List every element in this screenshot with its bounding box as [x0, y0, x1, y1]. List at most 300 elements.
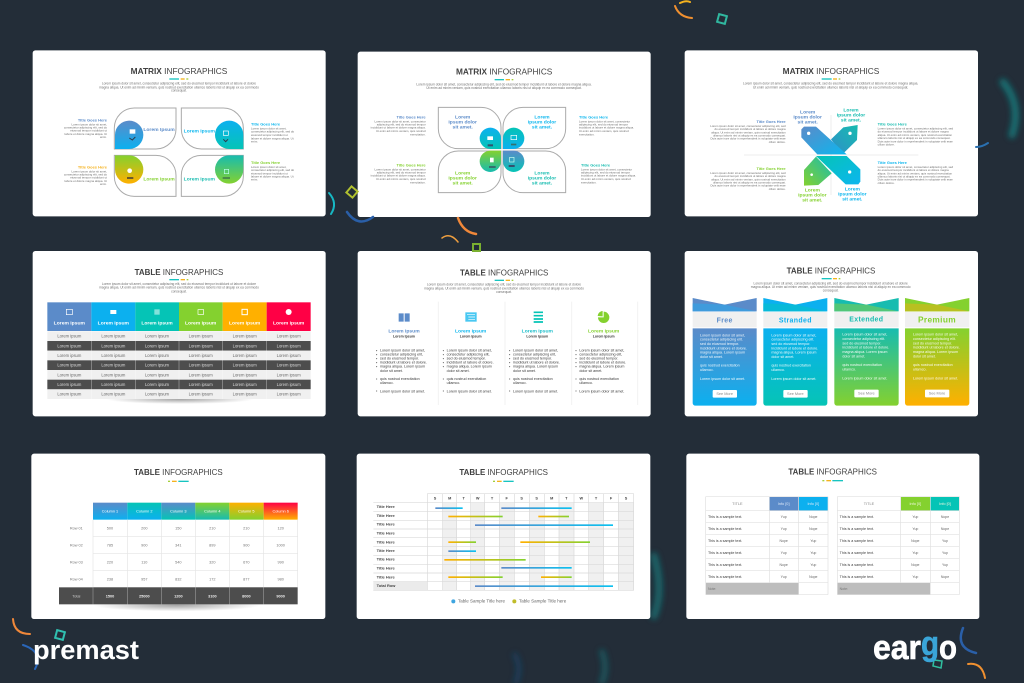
striped rows: Lorem ipsum	[277, 334, 301, 339]
gradient blob: top right	[503, 128, 524, 149]
side text: top left: Ut enim ad minim veniam, quis nostrud	[376, 129, 426, 133]
column 3: Lorem ipsum dolor sit amet.	[513, 389, 558, 393]
icons	[127, 129, 230, 179]
comparison table right: Yup	[912, 575, 918, 579]
total row: 25000	[139, 594, 150, 598]
comparison table right: This is a sample text.	[840, 551, 874, 555]
data grid: 320	[209, 560, 216, 564]
panel: table infographic 8 gantt	[357, 454, 650, 619]
comparison table right: This is a sample text.	[840, 563, 874, 567]
gantt grid: F	[610, 497, 613, 501]
gantt grid: W	[580, 497, 584, 501]
side text: top left: Lorem ipsum dolor sit amet, consectetur adipiscing elit, sed	[710, 124, 786, 128]
column 2: Lorem Ipsum	[460, 335, 482, 339]
panel: matrix infographic 3	[685, 50, 978, 216]
striped rows: Lorem ipsum	[233, 353, 257, 358]
column 2: dolor sit amet.	[447, 369, 470, 373]
plan: stranded: Lorem ipsum dolor sit amet,	[771, 333, 816, 337]
side text: bottom right: Ut enim ad minim veniam, quis nostrud	[581, 177, 631, 181]
column 4: consectetur adipiscing elit,	[579, 353, 622, 357]
petal labels: sit amet.	[453, 180, 473, 186]
comparison table left: Yup	[810, 563, 816, 567]
side text: top left: Lorem ipsum dolor sit amet,	[72, 122, 107, 126]
side text: top left: consectetur adipiscing elit, sed do	[64, 125, 107, 129]
side text: bottom right: Lorem ipsum dolor sit amet,	[251, 165, 287, 169]
plan: free: ullamco.	[700, 368, 714, 372]
data grid: 172	[209, 577, 216, 581]
petal labels: Lorem	[534, 171, 550, 177]
striped rows: Lorem ipsum	[145, 363, 170, 368]
row labels: Title Here	[377, 539, 396, 544]
striped rows: Lorem ipsum	[145, 372, 170, 377]
side text: bottom right: adipiscing elit, sed do eiusmod tempor	[581, 170, 630, 174]
side text: bottom left: aliqua. Ut enim ad minim veniam, quis nostrud exercitation	[711, 177, 786, 181]
side text: top right	[251, 122, 295, 143]
data grid: 670	[243, 560, 250, 564]
side text: bottom right: eiusmod tempor incididunt ut	[251, 171, 288, 175]
panel: table infographic 9	[686, 454, 979, 619]
comparison table left: Yup	[810, 551, 816, 555]
comparison table left: Yup	[781, 515, 787, 519]
data grid: 500	[107, 526, 113, 530]
striped rows: Lorem ipsum	[145, 334, 170, 339]
striped rows: Lorem ipsum	[57, 343, 82, 348]
plan: extended: magna aliqua. Lorem ipsum	[842, 350, 887, 354]
side text: top right: Ut enim ad minim veniam, quis nostrud	[579, 129, 629, 133]
column 2: sed do eiusmod tempor.	[447, 357, 486, 361]
column 3: Lorem ipsum dolor sit amet,	[513, 349, 558, 353]
plan: premium: dolor sit amet.	[913, 354, 936, 358]
column 3: ullamco.	[513, 381, 527, 385]
data grid: Row 02	[70, 543, 83, 547]
comparison table left: Nope	[779, 539, 788, 543]
background glows	[515, 82, 1015, 682]
gantt grid: S	[535, 497, 538, 501]
plan: stranded: Lorem ipsum dolor sit amet.	[771, 377, 816, 381]
column 2: magna aliqua. Lorem ipsum	[447, 365, 492, 369]
side text: top left: incididunt ut labore et dolore magna aliqua.	[371, 126, 426, 130]
gradient blob: top left	[115, 121, 143, 149]
gradient header	[93, 503, 298, 520]
column 1: incididunt ut labore et dolore.	[380, 361, 427, 365]
comparison table left	[706, 497, 828, 595]
comparison table left: This is a sample text.	[708, 563, 742, 567]
x shape labels: Ipsum dolor	[838, 192, 867, 198]
side text: top left: Duis aute irure dolor in reprehenderit in voluptate velit esse	[711, 137, 786, 141]
striped rows: Lorem ipsum	[145, 353, 170, 358]
comparison table right: Yup	[912, 515, 918, 519]
intro text: Lorem ipsum dolor sit amet, consectetur adipiscing elit, sed do eiusmod tempor incididunt ut labore et dolore magna aliqua.	[743, 82, 918, 86]
side text: top right: incididunt ut labore et dolore magna aliqua.	[579, 126, 634, 130]
plan: stranded: magna aliqua. Lorem ipsum	[771, 351, 816, 355]
column 2: Lorem ipsum dolor sit amet.	[447, 389, 492, 393]
intro text: Lorem ipsum dolor sit amet, consectetur adipiscing elit, sed do eiusmod tempor incididunt ut labore et dolore	[754, 281, 908, 285]
intro text: consequat.	[823, 289, 839, 293]
striped rows: Lorem ipsum	[189, 353, 213, 358]
side text: top right: Lorem ipsum dolor sit amet,	[251, 127, 287, 131]
intro text: Lorem ipsum dolor sit amet, consectetur adipiscing elit, sed do eiusmod tempor incididunt ut labore et dolore	[102, 282, 256, 286]
plan: premium: See More	[929, 392, 945, 396]
striped rows: Lorem ipsum	[277, 363, 301, 368]
plan: premium: quis nostrud exercitation	[913, 363, 953, 367]
side text: top right: labore et dolore magna aliqua. Ut	[251, 136, 294, 140]
side text: top left	[710, 119, 786, 144]
comparison table left: Info [0]	[778, 502, 790, 506]
data grid: 877	[243, 577, 250, 581]
row labels: Total Row	[377, 583, 396, 588]
striped rows: Lorem ipsum	[233, 363, 257, 368]
column 3: dolor sit amet.	[513, 369, 536, 373]
title accent	[822, 480, 843, 481]
data grid: 120	[277, 526, 284, 530]
gantt grid: T	[491, 497, 494, 501]
comparison table right: Yup	[912, 551, 918, 555]
row labels: Title Here	[377, 513, 396, 518]
matrix labels: Lorem Ipsum	[143, 127, 175, 133]
panel: table infographic 5	[358, 251, 651, 416]
plan: stranded: sed do eiusmod tempor.	[771, 342, 810, 346]
side text: top right: Lorem ipsum dolor sit amet, consectetur	[579, 119, 630, 123]
x shape labels: sit amet.	[802, 198, 823, 204]
total row: 1200	[174, 594, 183, 598]
data grid: Row 01	[70, 526, 83, 530]
x shape labels: Lorem	[800, 109, 816, 115]
side text: bottom left: enim.	[100, 182, 107, 186]
petal labels: ipsum dolor	[528, 176, 556, 182]
striped rows: Lorem ipsum	[277, 392, 301, 397]
data grid	[70, 520, 298, 587]
side text: top right: adipiscing elit, sed do eiusmod tempor	[579, 122, 628, 126]
panel: table infographic 7	[31, 454, 325, 619]
gantt grid: F	[505, 497, 508, 501]
side text: bottom right: Lorem ipsum dolor sit amet, consectetur	[581, 167, 632, 171]
striped rows: Lorem ipsum	[189, 343, 213, 348]
striped rows: Lorem ipsum	[57, 372, 82, 377]
column 3: incididunt ut labore et dolore.	[513, 361, 560, 365]
comparison table left: Yup	[781, 575, 787, 579]
side text: bottom left: Ut enim ad minim veniam, quis nostrud	[376, 177, 426, 181]
column 2: consectetur adipiscing elit,	[447, 353, 490, 357]
total row: 8000	[242, 594, 251, 598]
gantt grid: M	[550, 497, 553, 501]
comparison table right: Yup	[942, 551, 948, 555]
intro text: magna aliqua. Ut enim ad minim veniam, quis nostrud exercitation ullamco laboris nisi ut aliquip ex ea commodo	[751, 285, 911, 289]
colour header row: Lorem Ipsum	[185, 320, 217, 326]
colour header row	[47, 302, 311, 331]
data grid: 832	[175, 577, 182, 581]
gradient header: Column 4	[204, 509, 221, 513]
table shadow	[107, 395, 253, 404]
side text: bottom right: Lorem ipsum dolor sit amet, consectetur adipiscing elit, sed	[878, 165, 953, 169]
petal outlines	[438, 107, 566, 193]
plan: stranded: incididunt ut labore et dolore.	[771, 346, 818, 350]
comparison table right: Nope	[911, 563, 920, 567]
gantt grid: M	[448, 497, 451, 501]
column 1: consectetur adipiscing elit,	[380, 353, 423, 357]
plan: premium: magna aliqua. Lorem ipsum	[913, 350, 958, 354]
striped rows: Lorem ipsum	[145, 343, 170, 348]
striped rows: Lorem ipsum	[57, 363, 82, 368]
x shape labels: Ipsum dolor	[798, 193, 827, 199]
column 4: incididunt ut labore et dolore.	[579, 361, 626, 365]
total row: 3100	[208, 594, 217, 598]
side text: bottom right: labore et dolore magna aliqua. Ut	[251, 175, 294, 179]
legend: Table Sample Title here	[519, 599, 567, 604]
gantt grid: T	[595, 497, 598, 501]
plan: extended: incididunt ut labore et dolore.	[842, 346, 889, 350]
side text: bottom left: incididunt ut labore et dolore magna aliqua.	[371, 174, 426, 178]
side text: top right: exercitation.	[579, 132, 595, 136]
title: TABLE INFOGRAPHICS	[134, 467, 223, 477]
plan: extended	[834, 298, 899, 406]
comparison table left: Note:	[708, 587, 716, 591]
data grid: 200	[141, 526, 148, 530]
striped rows: Lorem ipsum	[101, 353, 126, 358]
colour header row: Lorem Ipsum	[141, 320, 173, 326]
side text: bottom left: Lorem ipsum dolor sit amet,	[72, 169, 107, 173]
comparison table right: This is a sample text.	[840, 539, 874, 543]
gradient header: Column 2	[136, 509, 153, 513]
intro text: Lorem ipsum dolor sit amet, consectetur adipiscing elit, sed do eiusmod tempor incididunt ut labore et dolore	[427, 283, 581, 287]
petal labels	[448, 115, 556, 187]
row labels: Title Here	[377, 522, 396, 527]
gantt grid: S	[520, 497, 523, 501]
title accent	[822, 278, 840, 279]
colour header row: Lorem Ipsum	[273, 320, 305, 326]
total row: 9000	[276, 594, 285, 598]
data grid: 980	[277, 577, 284, 581]
title: TABLE INFOGRAPHICS	[460, 267, 549, 277]
striped rows: Lorem ipsum	[277, 372, 301, 377]
striped rows	[47, 331, 311, 399]
data grid: 220	[107, 560, 113, 564]
title accent	[168, 481, 189, 482]
side text: bottom left: labore et dolore magna aliqua. Ut	[64, 179, 107, 183]
title accent	[822, 78, 840, 80]
striped rows: Lorem ipsum	[189, 372, 213, 377]
side text: top left: adipiscing elit, sed do eiusmod tempor	[377, 122, 426, 126]
side text: top right: do eiusmod tempor incididunt ut labore et dolore magna	[878, 130, 949, 134]
data grid: 210	[243, 526, 250, 530]
column 1: ullamco.	[380, 381, 394, 385]
comparison table right: Yup	[912, 527, 918, 531]
legend	[451, 599, 567, 604]
icons	[487, 135, 517, 168]
side text: top left: aliqua. Ut enim ad minim veniam, quis nostrud exercitation	[711, 130, 786, 134]
striped rows: Lorem ipsum	[233, 392, 257, 397]
logo: eargo	[873, 625, 957, 667]
column 2: ullamco.	[447, 381, 460, 385]
logo: premast: premast	[33, 635, 139, 665]
side text: bottom left: consectetur adipiscing elit, sed do	[64, 172, 107, 176]
column 4: ullamco.	[579, 381, 593, 385]
petal labels: ipsum dolor	[448, 120, 477, 126]
plan: stranded: Stranded	[779, 317, 812, 324]
plan: stranded	[763, 298, 827, 406]
side text: top left: Title Goes Here	[756, 119, 786, 124]
column 4: magna aliqua. Lorem ipsum	[579, 365, 624, 369]
plan: free: See More	[716, 392, 733, 396]
panel: table infographic 6 pricing	[685, 251, 978, 416]
plan: stranded: quis nostrud exercitation	[771, 364, 811, 368]
title accent	[495, 79, 513, 80]
column 2: Lorem Ipsum	[455, 329, 487, 335]
side text: bottom right: exercitation.	[581, 180, 597, 184]
plan: extended: See More	[858, 392, 875, 396]
x shape labels: Lorem	[805, 188, 821, 194]
plan: free: Lorem ipsum dolor sit amet,	[700, 333, 745, 337]
side text: bottom left	[710, 166, 786, 191]
matrix labels: Lorem Ipsum	[184, 177, 216, 183]
column 1: Lorem Ipsum	[388, 329, 420, 335]
petal labels: ipsum dolor	[528, 120, 556, 126]
plan: premium: Lorem ipsum dolor sit amet,	[913, 333, 958, 337]
side text: top right	[579, 114, 634, 136]
plan: stranded: dolor sit amet.	[771, 355, 794, 359]
side text: top left: ullamco laboris nisi ut aliquip ex ea commodo consequat.	[713, 133, 786, 137]
axis lines	[744, 115, 918, 195]
gradient header: Column 1	[102, 509, 118, 513]
side text: top left: labore et dolore magna aliqua. Ut	[64, 132, 107, 136]
comparison table left: Yup	[781, 551, 787, 555]
side text: bottom left: Title Goes Here	[396, 162, 426, 167]
plan: extended: dolor sit amet.	[842, 354, 865, 358]
comparison table right: Yup	[942, 563, 948, 567]
side text: bottom left: Title Goes Here	[78, 164, 108, 169]
data grid: 785	[107, 543, 113, 547]
striped rows: Lorem ipsum	[189, 363, 213, 368]
comparison table left: Yup	[810, 539, 816, 543]
side text: top right: cillum dolore.	[878, 143, 895, 147]
plan: free	[693, 298, 757, 406]
matrix outlines	[114, 108, 243, 196]
x shape labels: Ipsum dolor	[793, 114, 822, 120]
data grid: 957	[141, 577, 148, 581]
plan: premium: Premium	[918, 314, 956, 324]
column 3: consectetur adipiscing elit,	[513, 353, 556, 357]
intro text: consequat.	[171, 89, 187, 93]
striped rows: Lorem ipsum	[57, 392, 82, 397]
gantt grid	[373, 494, 634, 590]
comparison table right: This is a sample text.	[840, 527, 874, 531]
striped rows: Lorem ipsum	[189, 392, 213, 397]
comparison table right: This is a sample text.	[840, 515, 874, 519]
title: TABLE INFOGRAPHICS	[787, 266, 876, 276]
column 2: quis nostrud exercitation	[447, 377, 486, 381]
striped rows: Lorem ipsum	[189, 334, 213, 339]
side text: bottom right: Duis aute irure dolor in reprehenderit in voluptate velit esse	[878, 178, 953, 182]
row labels: Title Here	[377, 566, 396, 571]
side text: bottom right: incididunt ut labore et dolore magna aliqua.	[581, 174, 636, 178]
side text: top left	[371, 114, 426, 136]
petal labels: sit amet.	[532, 125, 553, 131]
panel: table infographic 4	[33, 251, 326, 416]
comparison table left: Nope	[779, 563, 788, 567]
side text: top right: consectetur adipiscing elit, sed do	[251, 130, 295, 134]
column 3: Lorem Ipsum	[522, 329, 554, 335]
intro text: magna aliqua. Ut enim ad minim veniam, quis nostrud exercitation ullamco laboris nisi ut aliquip ex ea commodo	[99, 85, 259, 89]
colour header row: Lorem Ipsum	[229, 320, 261, 326]
plan: premium: ullamco.	[913, 367, 927, 371]
column 4	[575, 311, 626, 393]
colour header row: Lorem Ipsum	[54, 320, 86, 326]
comparison table right: Nope	[911, 539, 920, 543]
intro text: consequat.	[496, 290, 512, 294]
plan: free: dolor sit amet.	[700, 355, 723, 359]
title: TABLE INFOGRAPHICS	[135, 267, 224, 277]
side text: bottom right: Title Goes Here	[581, 162, 611, 167]
plan: free: sed do eiusmod tempor.	[700, 342, 739, 346]
title: TABLE INFOGRAPHICS	[788, 467, 877, 477]
petal labels: ipsum dolor	[448, 175, 477, 181]
striped rows: Lorem ipsum	[101, 343, 126, 348]
plan: extended: quis nostrud exercitation	[842, 363, 882, 367]
gantt grid: T	[462, 497, 465, 501]
striped rows: Lorem ipsum	[57, 382, 82, 387]
striped rows: Lorem ipsum	[101, 392, 126, 397]
comparison table left: Nope	[809, 575, 818, 579]
column 2: Lorem ipsum dolor sit amet,	[447, 349, 492, 353]
plan: extended: Lorem ipsum dolor sit amet,	[842, 333, 887, 337]
title accent	[495, 280, 513, 281]
side text: bottom right: ullamco laboris nisi ut aliquip ex ea commodo consequat.	[878, 174, 951, 178]
gantt grid: S	[625, 497, 628, 501]
side text: top left: eiusmod tempor incididunt ut	[70, 129, 107, 133]
comparison table left: Info [0]	[807, 502, 819, 506]
intro text: Ut enim ad minim veniam, quis nostrud exercitation ullamco laboris nisi ut aliquip ex ea commodo consequat.	[426, 86, 582, 90]
column 3	[509, 312, 560, 393]
column 2: incididunt ut labore et dolore.	[447, 361, 494, 365]
data grid: 540	[175, 560, 182, 564]
matrix labels: Lorem Ipsum	[184, 128, 216, 134]
data grid: 238	[107, 577, 113, 581]
comparison table right: TITLE	[864, 502, 875, 506]
striped rows: Lorem ipsum	[233, 382, 257, 387]
striped rows: Lorem ipsum	[101, 372, 126, 377]
data grid: Row 03	[70, 560, 83, 564]
gantt grid: W	[476, 497, 480, 501]
data grid: 900	[243, 543, 250, 547]
x shape labels	[793, 108, 867, 204]
gradient header: Column 3	[170, 509, 187, 513]
side text: top right: aliqua. Ut enim ad minim veniam, quis nostrud exercitation	[878, 133, 953, 137]
intro text: Lorem ipsum dolor sit amet, consectetur adipiscing elit, sed do eiusmod tempor incididunt ut labore et dolore magna aliqua.	[416, 82, 592, 86]
side text: bottom right	[878, 160, 953, 185]
side text: bottom right: aliqua. Ut enim ad minim veniam, quis nostrud exercitation	[878, 171, 953, 175]
gradient blob: bottom right	[215, 155, 243, 184]
plan: stranded: See More	[787, 392, 804, 396]
plan: stranded: ullamco.	[771, 368, 785, 372]
data grid: 341	[175, 543, 182, 547]
comparison table left: This is a sample text.	[708, 575, 742, 579]
plan: free: magna aliqua. Lorem ipsum	[700, 351, 745, 355]
comparison table left: This is a sample text.	[708, 539, 742, 543]
data grid: 150	[175, 526, 182, 530]
side text: bottom right: enim.	[251, 178, 258, 182]
side text: top right: Title Goes Here	[579, 114, 609, 119]
striped rows: Lorem ipsum	[189, 382, 213, 387]
comparison table right: Nope	[941, 575, 949, 579]
intro text: consequat.	[171, 289, 187, 293]
gradient header: Column 6	[272, 509, 289, 513]
shadow	[93, 599, 260, 611]
column 1: quis nostrud exercitation	[380, 377, 420, 381]
column 1: Lorem ipsum dolor sit amet.	[380, 389, 425, 393]
column 4: Lorem ipsum dolor sit amet.	[579, 389, 624, 393]
petal labels: sit amet.	[453, 125, 473, 131]
column 1: sed do eiusmod tempor.	[380, 357, 419, 361]
column 1: Lorem ipsum dolor sit amet,	[380, 349, 425, 353]
